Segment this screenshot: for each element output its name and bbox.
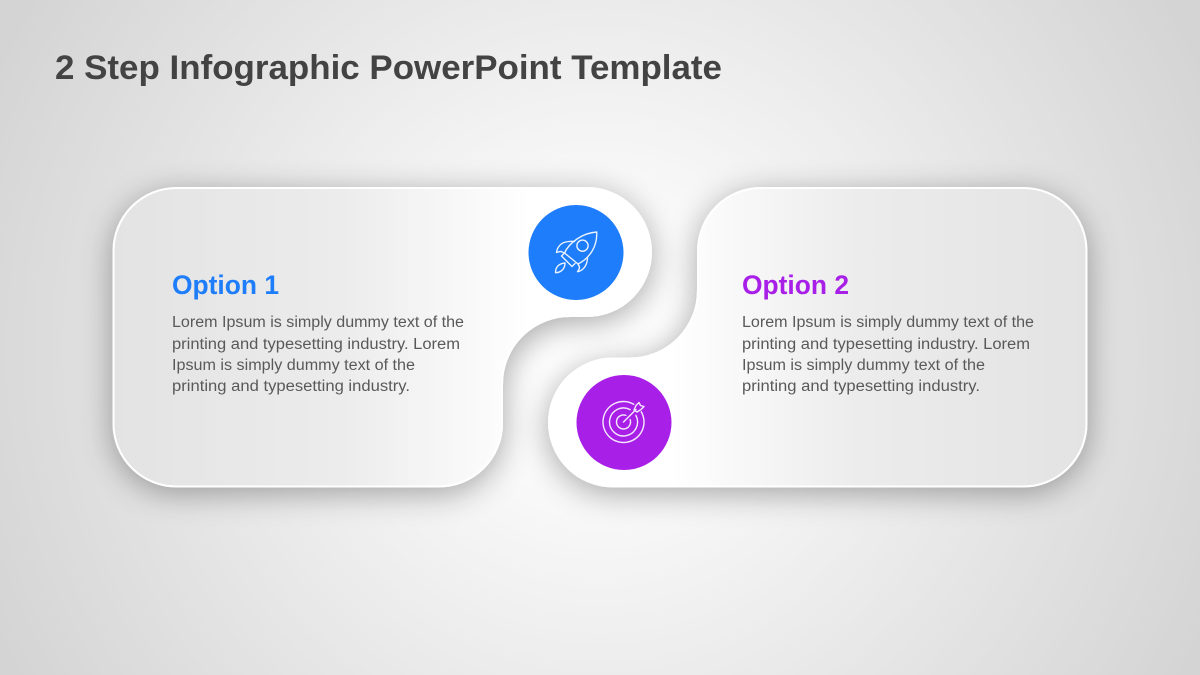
icon: target badge [576, 375, 672, 470]
icon: rocket badge [528, 205, 624, 300]
heading: option 2: Option 2 [742, 270, 849, 300]
text block: option 2: Ipsum is simply dummy text of the [742, 357, 985, 374]
text block: option 2: printing and typesetting industry. [742, 378, 980, 395]
text block: option 2 [742, 314, 1034, 395]
rocket glyph [556, 232, 597, 273]
panel: option 1 [114, 188, 651, 486]
heading: option 1: Option 1 [172, 270, 279, 300]
title: 2 Step Infographic PowerPoint Template [55, 49, 722, 87]
text block: option 1: printing and typesetting industry. [172, 378, 410, 395]
text block: option 1: Ipsum is simply dummy text of the [172, 357, 415, 374]
text block: option 1: Lorem Ipsum is simply dummy text of the [172, 314, 464, 331]
text block: option 2: Lorem Ipsum is simply dummy text of the [742, 314, 1034, 331]
panel: option 2 [549, 188, 1086, 486]
text block: option 1 [172, 314, 464, 395]
panel shape: option 2 card [549, 188, 1086, 486]
panel shape: option 1 card [114, 188, 651, 486]
target glyph [603, 402, 644, 443]
text block: option 1: printing and typesetting industry. Lorem [172, 336, 460, 353]
text block: option 2: printing and typesetting industry. Lorem [742, 336, 1030, 353]
